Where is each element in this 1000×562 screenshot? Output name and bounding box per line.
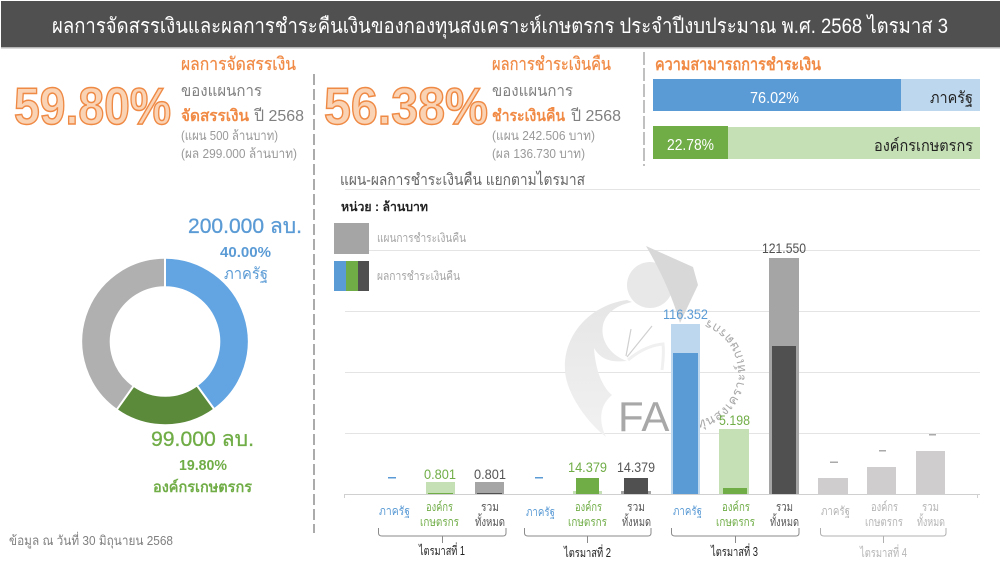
donut chart <box>96 256 234 412</box>
axis labels: quarter 1: เกษตรกร <box>420 515 459 529</box>
allocation description: ของแผนการ <box>181 83 262 100</box>
allocation description: ปี 2568 <box>254 107 304 125</box>
repayment description: ของแผนการ <box>492 83 573 100</box>
quarter brackets <box>378 528 946 543</box>
axis labels: quarter 3: องค์กร <box>722 500 750 514</box>
legend: actual: ผลการชำระเงินคืน <box>377 269 460 283</box>
donut label: farmer organisations: 99.000 ลบ. <box>151 428 254 451</box>
chart gridlines <box>345 190 980 434</box>
repayment description: (แผน 242.506 บาท) <box>492 128 595 143</box>
quarter labels: ไตรมาสที่ 3 <box>710 543 758 559</box>
quarter 3 bars <box>663 240 806 494</box>
heading: capacity: ความสามารถการชำระเงิน <box>655 55 821 74</box>
axis labels: quarter 4 <box>821 500 945 529</box>
axis labels: quarter 3: รวม <box>776 500 793 514</box>
donut label: government: 200.000 ลบ. <box>188 215 302 238</box>
repayment description: ปี 2568 <box>571 107 621 125</box>
axis labels: quarter 2: ภาครัฐ <box>526 505 555 519</box>
repayment description: (ผล 136.730 บาท) <box>492 146 585 161</box>
header banner <box>1 1 1000 48</box>
axis labels: quarter 1: ภาครัฐ <box>379 504 410 518</box>
axis labels: quarter 3: เกษตรกร <box>716 515 755 529</box>
axis labels: quarter 4: ภาครัฐ <box>821 504 850 518</box>
bar chart <box>388 240 945 494</box>
donut label: government: 40.00% <box>220 244 271 261</box>
axis labels: quarter 1: องค์กร <box>426 500 453 514</box>
axis labels: quarter 4: เกษตรกร <box>865 515 903 529</box>
repayment description: ชำระเงินคืน <box>492 107 565 125</box>
quarter 2 bars <box>535 459 655 494</box>
axis labels: quarter 2: รวม <box>627 500 645 514</box>
unit label: หน่วย : ล้านบาท <box>341 200 428 214</box>
quarter 3 bars: 121.550 <box>762 240 806 256</box>
big number: allocation percent: 59.80% <box>14 78 171 136</box>
legend: plan <box>334 223 466 254</box>
allocation description <box>181 83 304 161</box>
repayment description <box>492 83 621 161</box>
quarter 3 bars: 116.352 <box>663 306 708 322</box>
axis labels: quarter 2: เกษตรกร <box>568 515 607 529</box>
dashed dividers <box>314 52 644 533</box>
axis labels: quarter 1 <box>379 500 505 529</box>
allocation description: (แผน 500 ล้านบาท) <box>181 128 278 143</box>
watermark logo: กองทุนสงเคราะห์เกษตรกร <box>700 320 746 430</box>
heading: allocation: ผลการจัดสรรเงิน <box>181 54 296 74</box>
axis labels: quarter 2 <box>526 500 651 529</box>
allocation description: จัดสรรเงิน <box>181 107 249 125</box>
panel: allocation result <box>14 54 304 161</box>
donut label: government <box>188 215 302 283</box>
chart title: แผน-ผลการชำระเงินคืน แยกตามไตรมาส <box>340 170 585 189</box>
axis labels: quarter 4: ทั้งหมด <box>917 513 945 529</box>
quarter labels: ไตรมาสที่ 4 <box>859 544 907 560</box>
capacity bar: government: 76.02% <box>750 90 799 107</box>
axis labels: quarter 2: องค์กร <box>575 500 602 514</box>
x axis <box>344 494 980 498</box>
panel: repayment capacity <box>653 55 980 159</box>
capacity bar: government <box>653 79 980 111</box>
quarter labels <box>418 542 907 560</box>
axis labels: quarter 2: ทั้งหมด <box>622 513 651 529</box>
quarter 1 bars <box>388 466 506 494</box>
watermark logo: FA <box>618 393 669 440</box>
axis labels: quarter 1: รวม <box>481 500 499 514</box>
quarter 1 bars: 0.801 <box>474 466 506 482</box>
axis labels: quarter 3: ทั้งหมด <box>770 513 799 529</box>
data date note: ข้อมูล ณ วันที่ 30 มิถุนายน 2568 <box>9 532 173 549</box>
donut label: farmer organisations <box>151 428 254 496</box>
quarter 3 bars: 5.198 <box>719 412 750 428</box>
capacity bar: farmer organisations: 22.78% <box>667 137 714 154</box>
heading: repayment: ผลการชำระเงินคืน <box>492 54 611 74</box>
quarter labels: ไตรมาสที่ 1 <box>418 542 465 558</box>
capacity bar: farmer organisations <box>653 126 980 159</box>
axis labels: quarter 3: ภาครัฐ <box>673 504 702 518</box>
donut label: farmer organisations: 19.80% <box>179 457 227 474</box>
donut label: government: ภาครัฐ <box>224 266 268 283</box>
quarter 2 bars: 14.379 <box>568 459 607 475</box>
capacity bar: farmer organisations: องค์กรเกษตรกร <box>874 136 973 155</box>
axis labels: quarter 4: รวม <box>922 500 939 514</box>
allocation description: (ผล 299.000 ล้านบาท) <box>181 146 297 161</box>
quarter 4 bars <box>818 434 945 494</box>
axis labels: quarter 1: ทั้งหมด <box>475 513 505 529</box>
quarter 1 bars: 0.801 <box>424 466 456 482</box>
axis labels: quarter 4: องค์กร <box>871 500 898 514</box>
donut label: farmer organisations: องค์กรเกษตรกร <box>153 478 253 496</box>
legend: actual <box>334 261 460 291</box>
legend: plan: แผนการชำระเงินคืน <box>377 231 466 245</box>
quarter labels: ไตรมาสที่ 2 <box>563 544 611 560</box>
big number: repayment percent: 56.38% <box>324 78 488 136</box>
capacity bar: government: ภาครัฐ <box>930 90 973 107</box>
panel: repayment result <box>324 54 621 161</box>
watermark logo <box>565 246 746 440</box>
axis labels: quarter 3 <box>673 500 799 529</box>
quarter 2 bars: 14.379 <box>617 459 655 475</box>
